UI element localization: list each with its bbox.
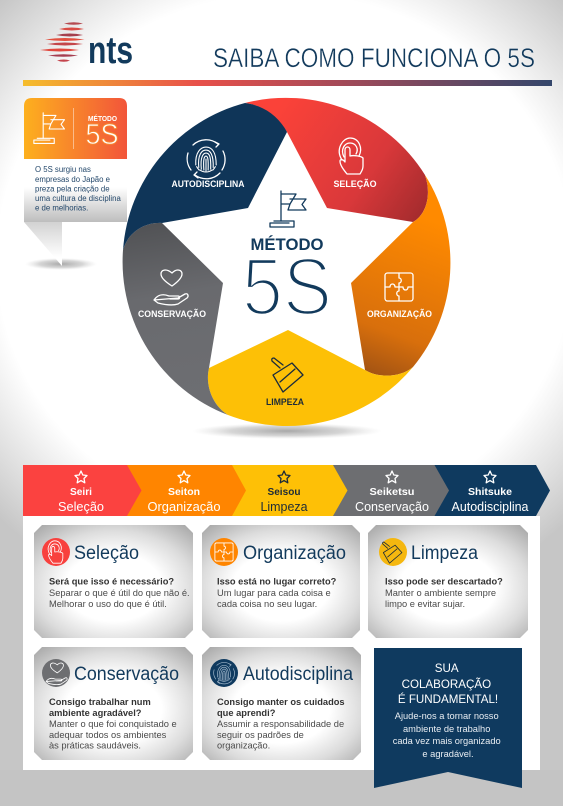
card: Conservação: Manter o que foi conquistado e [49, 719, 177, 729]
card: Conservação: Consigo trabalhar num [49, 697, 151, 707]
card: Organização: cada coisa no seu lugar. [217, 599, 317, 609]
callout tail shadow [25, 258, 97, 270]
callout: 5S origin: O 5S surgiu nas [35, 165, 91, 174]
segment: Limpeza [208, 330, 413, 426]
wheel shadow [192, 423, 382, 439]
ribbon: call to action: COLABORAÇÃO [402, 678, 491, 691]
white content panel [23, 516, 540, 770]
segment: Seleção [245, 98, 428, 222]
chevron: Seiton: Organização [148, 500, 221, 514]
card: Autodisciplina: organização. [217, 740, 270, 750]
callout: 5S origin: MÉTODO [88, 114, 117, 123]
segment: Autodisciplina [123, 103, 287, 250]
segment: Autodisciplina: AUTODISCIPLINA [172, 179, 245, 189]
icon: flag [270, 191, 306, 227]
chevron: Seiri [23, 465, 142, 516]
card: Seleção: Será que isso é necessário? [49, 576, 174, 586]
callout: 5S origin [24, 98, 127, 270]
segment: Conservação [123, 223, 228, 415]
card: Limpeza: limpo e evitar sujar. [385, 599, 465, 609]
segment: Limpeza: LIMPEZA [266, 397, 305, 407]
segment: Organização: ORGANIZAÇÃO [367, 309, 432, 319]
chevron: Seisou: Limpeza [260, 500, 308, 514]
callout: 5S origin: uma cultura de disciplina [35, 194, 121, 203]
logo: nts: nts [88, 30, 133, 72]
chevron: Seiketsu [330, 465, 449, 516]
callout: 5S origin: preza pela criação de [35, 184, 110, 194]
card: Autodisciplina [202, 647, 361, 760]
center: Método 5S: 5S [242, 242, 332, 332]
chevron: Seiton: Seiton [168, 486, 200, 498]
chevron: Seisou [228, 465, 348, 516]
callout: 5S origin: 5S [86, 119, 118, 151]
card: Autodisciplina: Consigo manter os cuidados [217, 697, 345, 707]
ribbon: call to action: ambiente de trabalho [403, 724, 490, 734]
chevron: Seiri: Seiri [70, 486, 92, 498]
card: Organização: Um lugar para cada coisa e [217, 588, 331, 598]
ribbon: call to action [374, 648, 522, 788]
chevron: Shitsuke: Shitsuke [468, 486, 512, 498]
card: Conservação: às práticas saudáveis. [49, 740, 141, 750]
ribbon: call to action: cada vez mais organizado [393, 736, 501, 746]
chevron: Shitsuke: Autodisciplina [452, 500, 529, 514]
card: Autodisciplina: Autodisciplina [243, 664, 353, 685]
card: Conservação: ambiente agradável? [49, 708, 142, 718]
chevron: Seisou: Seisou [268, 486, 300, 498]
card: Seleção: Melhorar o uso do que é útil. [49, 599, 167, 609]
card: Autodisciplina: que aprendi? [217, 708, 276, 718]
header gradient bar [23, 80, 552, 86]
ribbon: call to action: É FUNDAMENTAL! [398, 693, 498, 706]
callout: 5S origin: e de melhorias. [35, 204, 88, 212]
callout: 5S origin: empresas do Japão e [35, 175, 110, 184]
card: Autodisciplina: seguir os padrões de [217, 730, 304, 740]
segment: Seleção: SELEÇÃO [334, 179, 377, 189]
ribbon: call to action: e agradável. [422, 749, 474, 759]
card: Conservação [34, 647, 193, 760]
ribbon: call to action: Ajude-nos a tornar nosso [395, 711, 499, 721]
chevron: Seiketsu: Seiketsu [370, 486, 414, 498]
segment: Organização [351, 175, 450, 376]
card: Conservação: adequar todos os ambientes [49, 730, 167, 740]
center: Método 5S: MÉTODO [250, 235, 324, 254]
card: Conservação: Conservação [74, 664, 179, 685]
chevron: Seiri: Seleção [58, 500, 104, 514]
logo: nts [40, 22, 133, 72]
card: Limpeza [368, 525, 528, 638]
card: Organização: Organização [243, 543, 346, 564]
chevron: Shitsuke [430, 465, 550, 516]
card: Seleção [34, 525, 193, 638]
chevron: Seiton [125, 465, 246, 516]
5S wheel [123, 98, 450, 426]
card: Seleção: Seleção [74, 543, 139, 564]
ribbon: call to action: SUA [435, 662, 459, 675]
chevron: Seiketsu: Conservação [355, 500, 429, 514]
card: Organização: Isso está no lugar correto? [217, 576, 337, 586]
card: Organização [202, 525, 360, 638]
segment: Conservação: CONSERVAÇÃO [138, 309, 206, 319]
chevron banner [23, 465, 550, 516]
card: Limpeza: Isso pode ser descartado? [385, 576, 503, 586]
card: Limpeza: Limpeza [411, 543, 478, 564]
card: Limpeza: Manter o ambiente sempre [385, 588, 496, 598]
card: Seleção: Separar o que é útil do que não é. [49, 588, 190, 598]
center: Método 5S [242, 191, 332, 332]
card: Autodisciplina: Assumir a responsabilidade de [217, 719, 344, 729]
